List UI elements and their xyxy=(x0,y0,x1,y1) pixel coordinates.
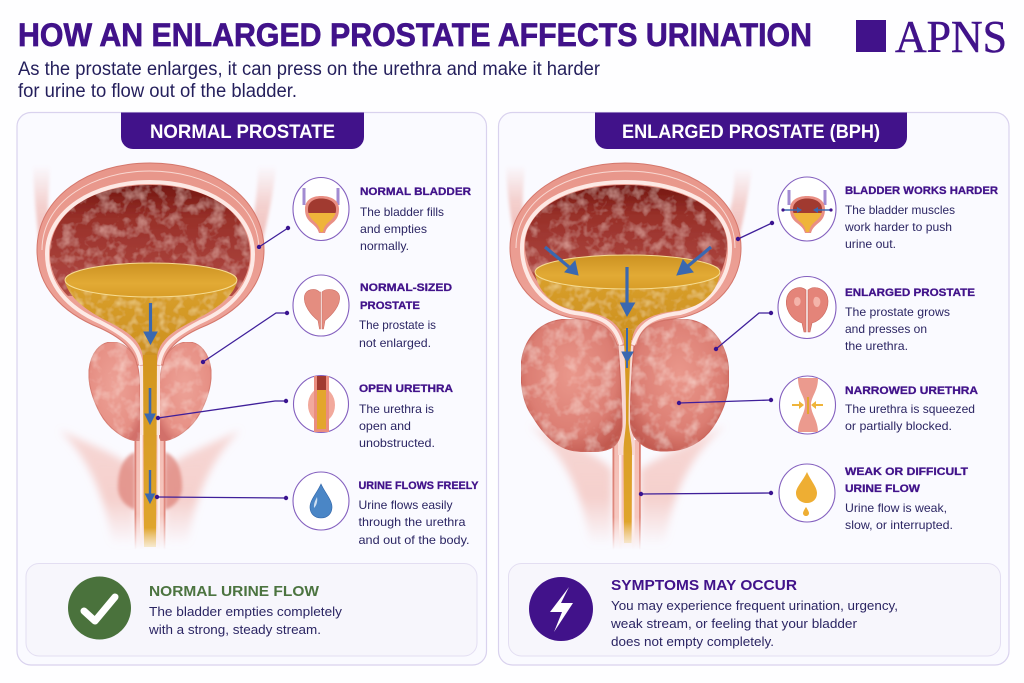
urine xyxy=(65,282,237,360)
panel: normal prostate xyxy=(17,112,486,665)
bladder cavity xyxy=(50,185,250,296)
callout text xyxy=(610,577,898,649)
text: normal-sized prostate: The prostate is xyxy=(359,318,436,332)
text: bladder works harder xyxy=(844,185,998,251)
text: enlarged prostate: the urethra. xyxy=(845,339,908,353)
bladder cavity xyxy=(525,185,727,285)
prostate right lobe xyxy=(630,319,729,451)
text: narrowed urethra: The urethra is squeezed xyxy=(845,402,975,416)
wall highlight xyxy=(522,182,730,345)
illustration: enlarged prostate xyxy=(506,163,774,550)
text: narrowed urethra: or partially blocked. xyxy=(845,419,952,433)
urethra tube xyxy=(134,430,166,550)
text: enlarged prostate: The prostate grows xyxy=(845,305,950,319)
urine surface xyxy=(65,263,237,297)
leader lines xyxy=(157,228,288,498)
wall highlight xyxy=(47,182,253,365)
text: normal-sized prostate: PROSTATE xyxy=(360,300,421,312)
flow arrows xyxy=(144,303,157,503)
text: open urethra: unobstructed. xyxy=(359,436,435,450)
text: open urethra xyxy=(359,383,453,450)
text: normal-sized prostate: NORMAL-SIZED xyxy=(360,282,452,294)
callout text: does not empty completely. xyxy=(611,634,774,649)
ureters xyxy=(506,165,752,240)
panel heading: ENLARGED PROSTATE (BPH) xyxy=(622,121,880,143)
wall outer line xyxy=(516,171,735,248)
text: normal bladder: NORMAL BLADDER xyxy=(360,186,471,198)
illustration: normal bladder and prostate xyxy=(33,163,290,550)
prostate left lobe xyxy=(521,319,622,452)
panel background xyxy=(17,112,486,665)
text: normal bladder: The bladder fills xyxy=(360,205,444,219)
text: urine flows freely: URINE FLOWS FREELY xyxy=(358,480,479,492)
bladder wall xyxy=(37,163,264,365)
panel: enlarged prostate xyxy=(498,112,1009,665)
text: weak or difficult urine flow: WEAK OR DIFFICULT xyxy=(845,466,968,478)
callout text xyxy=(148,583,342,637)
icon: narrowed urethra xyxy=(780,376,836,434)
icon: enlarged prostate xyxy=(778,276,836,338)
urine xyxy=(535,274,720,340)
text: urine flows freely: through the urethra xyxy=(358,515,466,529)
text: weak or difficult urine flow: Urine flow is weak, xyxy=(845,501,947,515)
icon: check mark xyxy=(68,576,131,640)
flow arrows xyxy=(545,247,711,368)
icon: normal bladder xyxy=(293,178,349,240)
callout text: weak stream, or feeling that your bladder xyxy=(610,616,858,631)
callout text: with a strong, steady stream. xyxy=(148,622,321,637)
urine surface xyxy=(535,255,720,289)
icon: open urethra xyxy=(294,376,348,432)
urethra tube xyxy=(612,440,641,550)
panel heading xyxy=(121,112,364,149)
panel background xyxy=(498,112,1009,665)
prostate right lobe xyxy=(159,342,211,441)
logo wordmark: APNS xyxy=(895,11,1007,62)
callout text: The bladder empties completely xyxy=(149,604,342,619)
wall outer line xyxy=(42,171,259,250)
text: urine flows freely: and out of the body. xyxy=(358,533,470,547)
text: normal bladder: and empties xyxy=(360,222,427,236)
text: urine flows freely: Urine flows easily xyxy=(358,498,452,512)
pelvic tissue xyxy=(60,430,240,545)
subtitle: for urine to flow out of the bladder. xyxy=(18,81,297,102)
icon: yellow urine drops xyxy=(779,464,835,522)
text: bladder works harder: work harder to push xyxy=(844,220,952,234)
text: bladder works harder: The bladder muscles xyxy=(845,203,955,217)
text: open urethra: open and xyxy=(359,419,411,433)
text: bladder works harder: BLADDER WORKS HARDER xyxy=(845,185,998,197)
icon: bladder works harder xyxy=(778,177,836,241)
text: enlarged prostate: and presses on xyxy=(845,322,927,336)
text: open urethra: The urethra is xyxy=(359,402,434,416)
callout: symptoms may occur xyxy=(508,564,1000,656)
panel heading xyxy=(595,112,907,149)
icon: blue urine drop xyxy=(293,472,349,530)
text: enlarged prostate: ENLARGED PROSTATE xyxy=(845,287,976,299)
prostate left lobe xyxy=(89,342,140,441)
text: narrowed urethra: NARROWED URETHRA xyxy=(845,385,978,397)
logo square xyxy=(856,20,886,52)
pelvic tissue xyxy=(530,425,725,545)
text: bladder works harder: urine out. xyxy=(845,237,896,251)
subtitle: As the prostate enlarges, it can press on the urethra and make it harder xyxy=(18,59,601,80)
icon: normal prostate xyxy=(293,275,349,336)
text: normal bladder: normally. xyxy=(360,239,409,253)
urethra wall through prostate xyxy=(140,350,160,435)
title: HOW AN ENLARGED PROSTATE AFFECTS URINATION xyxy=(18,17,812,53)
callout: normal urine flow xyxy=(26,564,477,656)
bladder wall xyxy=(510,163,741,345)
logo xyxy=(856,11,1007,62)
text: narrowed urethra xyxy=(845,385,978,433)
leader lines xyxy=(641,223,772,494)
subtitle xyxy=(18,59,601,102)
text: enlarged prostate xyxy=(845,287,976,353)
icon: lightning bolt xyxy=(529,577,593,641)
narrowed urethra stream xyxy=(624,330,632,543)
text: normal-sized prostate xyxy=(359,282,452,350)
urethra urine stream xyxy=(143,355,157,547)
panel heading: NORMAL PROSTATE xyxy=(150,121,335,143)
urethra wall through prostate xyxy=(618,330,634,455)
text: open urethra: OPEN URETHRA xyxy=(359,383,453,395)
text: urine flows freely xyxy=(358,480,479,547)
text: normal-sized prostate: not enlarged. xyxy=(359,336,431,350)
text: normal bladder xyxy=(360,186,471,253)
text: weak or difficult urine flow xyxy=(845,466,968,532)
text: weak or difficult urine flow: slow, or interrupted. xyxy=(845,518,953,532)
callout text: SYMPTOMS MAY OCCUR xyxy=(611,577,797,594)
callout text: You may experience frequent urination, urgency, xyxy=(611,598,898,613)
callout text: NORMAL URINE FLOW xyxy=(149,583,320,600)
text: weak or difficult urine flow: URINE FLOW xyxy=(845,483,920,495)
ureters xyxy=(33,165,276,245)
